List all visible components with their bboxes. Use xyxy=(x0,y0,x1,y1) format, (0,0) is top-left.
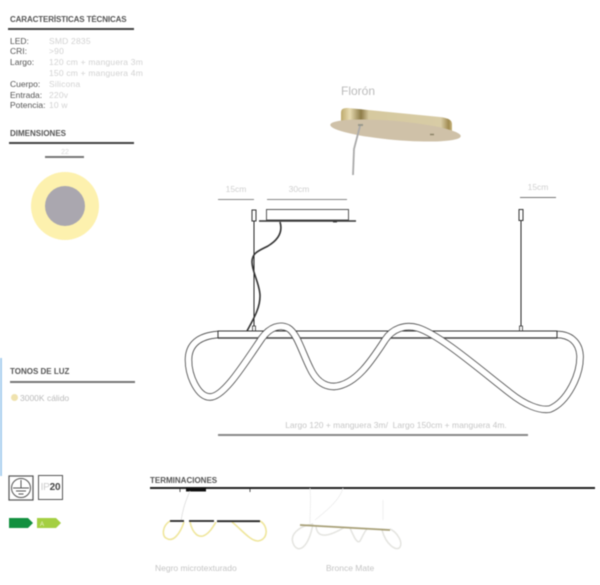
heading rule xyxy=(150,487,595,488)
icon: energy label light green: A xyxy=(40,522,44,528)
illustration: bronce mate xyxy=(292,487,402,550)
illustration: florón photo xyxy=(330,108,462,176)
tone label: 3000K cálido xyxy=(20,393,69,403)
dimension rule xyxy=(45,156,84,158)
spec: Cuerpo: Cuerpo: xyxy=(10,79,40,89)
panel: características técnicas xyxy=(7,14,143,110)
icon: energy label dark green xyxy=(8,517,34,529)
spec: Potencia: Potencia: xyxy=(10,100,45,110)
ceiling canopy xyxy=(259,210,356,222)
right suspension xyxy=(519,210,523,331)
heading rule xyxy=(8,28,134,30)
spec: LED xyxy=(10,36,91,46)
spec: Cuerpo: Silicona xyxy=(49,79,80,89)
spec: Largo: Largo: xyxy=(10,57,34,67)
cable xyxy=(353,126,360,175)
spec: Entrada: Entrada: xyxy=(10,90,42,100)
icon: IP20 xyxy=(38,475,63,500)
technical drawing: pendant lamp xyxy=(184,208,584,414)
dimension rule xyxy=(267,199,347,200)
icon: IP20: IP20 xyxy=(41,482,60,493)
length rule xyxy=(218,434,528,436)
heading rule xyxy=(10,381,135,382)
heading rule xyxy=(9,142,134,144)
dimension rule xyxy=(218,199,254,200)
screw details xyxy=(430,134,434,136)
spec: CRI xyxy=(10,46,64,56)
label: florón: Florón xyxy=(341,84,375,98)
spec: Entrada xyxy=(10,90,68,100)
lamp bar xyxy=(218,331,557,338)
left suspension xyxy=(252,210,256,331)
dimension label: 30cm xyxy=(289,184,309,194)
lamp disc xyxy=(45,186,85,226)
illustration: negro microtexturado xyxy=(162,488,268,542)
tone swatch xyxy=(11,394,18,401)
spec: Largo xyxy=(10,57,143,78)
spec: CRI: CRI: xyxy=(10,46,27,56)
icon: energy label light green xyxy=(36,517,62,529)
top plate xyxy=(341,108,452,136)
spec: LED: SMD 2835 xyxy=(49,36,91,46)
spec: Potencia: 10 w xyxy=(49,100,68,110)
heading: terminaciones: TERMINACIONES xyxy=(150,476,217,485)
caption: lengths: Largo 120 + manguera 3m/ Largo 150cm + manguera 4m. xyxy=(285,420,507,430)
spec: Entrada: 220v xyxy=(49,90,68,100)
panel: tonos de luz xyxy=(9,367,136,403)
dimension label: 22: 22 xyxy=(61,149,69,156)
spec: Cuerpo xyxy=(10,79,80,89)
accent bar: left edge xyxy=(0,358,2,476)
label: negro microtexturado: Negro microtexturado xyxy=(155,563,237,573)
flexible tube xyxy=(188,326,580,409)
heading: características técnicas: CARACTERÍSTICAS TÉCNICAS xyxy=(10,15,126,24)
label: bronce mate: Bronce Mate xyxy=(326,563,374,573)
heading: tonos de luz: TONOS DE LUZ xyxy=(10,367,69,376)
icon: round lamp with warm glow xyxy=(31,172,99,240)
power cable xyxy=(247,222,281,331)
bar end caps xyxy=(218,331,557,338)
icon: earth symbol xyxy=(8,474,34,502)
heading: dimensiones: DIMENSIONES xyxy=(10,129,66,138)
spec: LED: LED: xyxy=(10,36,29,46)
spec: Largo: 150 cm + manguera 4m xyxy=(49,68,143,78)
spec: CRI: >90 xyxy=(49,46,64,56)
panel: dimensiones xyxy=(8,129,135,240)
dimension label: 15cm xyxy=(528,182,548,192)
spec: Potencia xyxy=(10,100,68,110)
dimension rule xyxy=(520,197,556,198)
base plate xyxy=(329,115,462,146)
dimension label: 15cm xyxy=(226,184,246,194)
spec: Largo: 120 cm + manguera 3m xyxy=(49,57,143,67)
panel: terminaciones xyxy=(149,476,596,573)
